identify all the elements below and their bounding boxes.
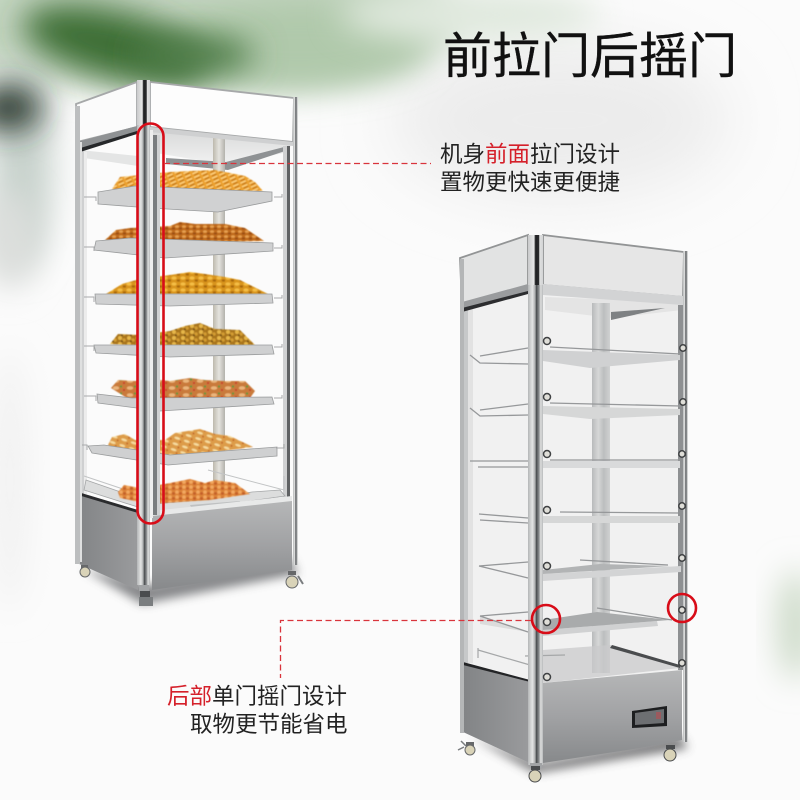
right shelf 7 base tray (478, 645, 680, 683)
right cabinet casters (458, 741, 676, 782)
shelf 4 with round buns (84, 323, 282, 357)
floor shadow under left cabinet (82, 558, 298, 604)
right shelf 5 (479, 560, 681, 581)
door hinge knobs (544, 338, 686, 680)
right cabinet glass body (462, 285, 683, 683)
right cabinet frame posts (460, 235, 688, 768)
left cabinet stainless base (77, 492, 292, 590)
shelf 5 with sandwiches and greens (84, 378, 282, 411)
right cabinet top header panels (460, 235, 684, 312)
shelf 6 with sandwiches (80, 429, 284, 465)
shelf 1 with french fries (84, 170, 282, 212)
left cabinet frame posts (75, 80, 298, 591)
floor shadow under right cabinet (470, 736, 688, 773)
callout marker: front door highlight and dashed leader (138, 124, 431, 524)
right cabinet stainless base (463, 662, 682, 763)
callout text: rear swing door: 后部单门摇门设计 (167, 684, 347, 709)
right cabinet central column (592, 303, 610, 673)
right shelf 4 (479, 512, 680, 523)
callout text: front sliding door: 置物更快速更便捷 (440, 170, 620, 195)
title: 前拉门后摇门 (443, 30, 737, 84)
left cabinet top header panels (76, 82, 294, 153)
right cabinet: rear swing door model (458, 235, 688, 782)
right shelf 6 (480, 608, 672, 636)
callout text: front sliding door: 机身前面拉门设计 (440, 142, 620, 167)
temperature display panel (632, 706, 667, 728)
left cabinet central column (213, 138, 225, 488)
right shelf 2 (470, 403, 680, 419)
shelf 2 with brown fried food (84, 222, 282, 258)
callout text: rear swing door: 取物更节能省电 (190, 712, 348, 737)
shelf 7 food: fried pieces in bottom tray (84, 470, 285, 514)
right shelf 3 (470, 460, 680, 468)
callout marker: hinge highlights and dashed leader (280, 594, 696, 678)
left cabinet: front sliding door model (75, 80, 303, 606)
left cabinet glass body (78, 125, 292, 515)
right shelf 1 (470, 347, 680, 368)
shelf 3 with golden nuggets (84, 272, 282, 306)
left cabinet casters (80, 565, 303, 606)
